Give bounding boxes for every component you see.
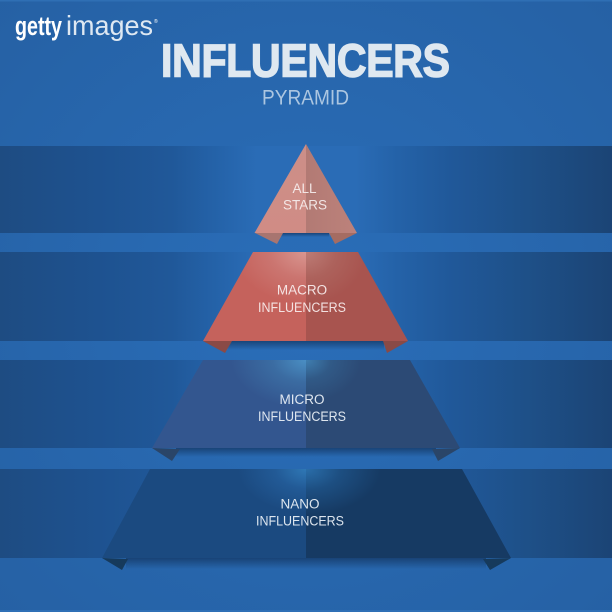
label: all stars — [283, 181, 327, 212]
tier 2: macro influencers — [203, 252, 408, 353]
label: all stars: ALL — [292, 181, 317, 196]
title: INFLUENCERS — [161, 35, 450, 87]
label: macro influencers — [258, 282, 346, 315]
label: macro influencers: INFLUENCERS — [258, 300, 346, 315]
label: micro influencers: INFLUENCERS — [258, 409, 346, 424]
label: macro influencers: MACRO — [277, 282, 327, 298]
label: micro influencers: MICRO — [280, 392, 324, 407]
logo: gettyimages: ® — [154, 18, 158, 25]
background band 4 — [0, 469, 612, 558]
label: micro influencers — [258, 392, 346, 424]
label: all stars: STARS — [283, 198, 327, 212]
label: nano influencers: NANO — [280, 496, 320, 512]
label: nano influencers — [256, 496, 344, 528]
background band 3 — [0, 360, 612, 448]
subtitle: PYRAMID — [262, 86, 349, 110]
tier 1: all stars — [254, 144, 357, 244]
tier 4: nano influencers — [102, 469, 511, 570]
logo: gettyimages: images — [66, 10, 153, 41]
background band 2 — [0, 252, 612, 341]
tier 3: micro influencers — [152, 360, 460, 461]
logo: gettyimages — [15, 10, 158, 41]
logo: gettyimages: getty — [15, 11, 62, 41]
label: nano influencers: INFLUENCERS — [256, 514, 344, 528]
background band 1 — [0, 146, 612, 233]
